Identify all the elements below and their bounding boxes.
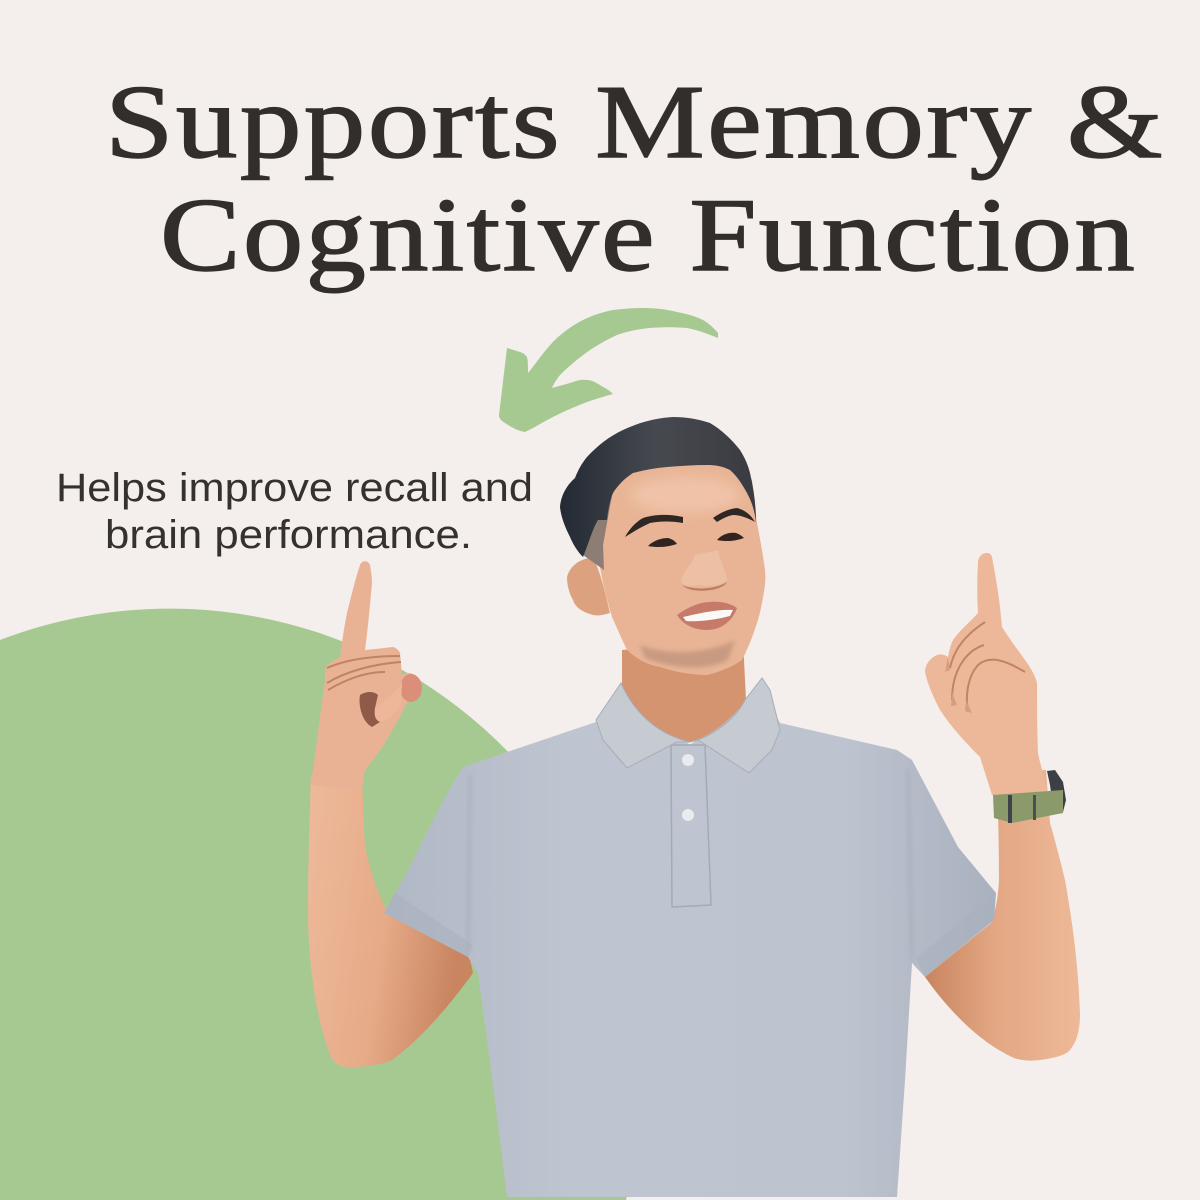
lips — [677, 602, 737, 630]
forehead highlight — [630, 477, 740, 513]
hair fade — [572, 485, 613, 570]
subtitle text: Helps improve recall and — [56, 466, 533, 510]
eyebrows — [625, 515, 683, 537]
left arm — [308, 775, 473, 1067]
hair — [560, 417, 756, 557]
watch — [993, 770, 1066, 823]
fingernails — [945, 657, 972, 713]
right hand — [925, 553, 1048, 797]
title: Cognitive Function — [160, 176, 1137, 293]
thumb tip — [400, 674, 422, 702]
teeth — [683, 610, 733, 621]
shirt — [384, 690, 996, 1197]
nose — [681, 550, 727, 586]
head — [560, 417, 765, 675]
buttons — [682, 754, 694, 766]
neck — [622, 640, 746, 742]
title — [105, 63, 1165, 293]
sleeve cuffs — [384, 893, 996, 977]
face — [597, 455, 765, 675]
collar — [596, 678, 780, 773]
arrow — [499, 308, 718, 432]
curled finger lines — [327, 656, 401, 690]
curled fingertip — [375, 680, 402, 722]
palm hollow — [360, 692, 380, 727]
left hand — [310, 561, 422, 790]
right arm — [925, 770, 1080, 1061]
sleeve seam shading — [468, 770, 912, 960]
stubble — [640, 640, 735, 667]
ear — [567, 558, 610, 615]
placket — [671, 745, 711, 907]
subtitle text: brain performance. — [105, 513, 472, 557]
nose shadow — [682, 582, 727, 591]
eyes — [648, 538, 677, 547]
finger lines — [950, 622, 1025, 712]
green background circle — [0, 609, 641, 1200]
subtitle text — [56, 466, 533, 557]
man pointing up — [308, 417, 1080, 1197]
title: Supports Memory & — [105, 63, 1165, 180]
